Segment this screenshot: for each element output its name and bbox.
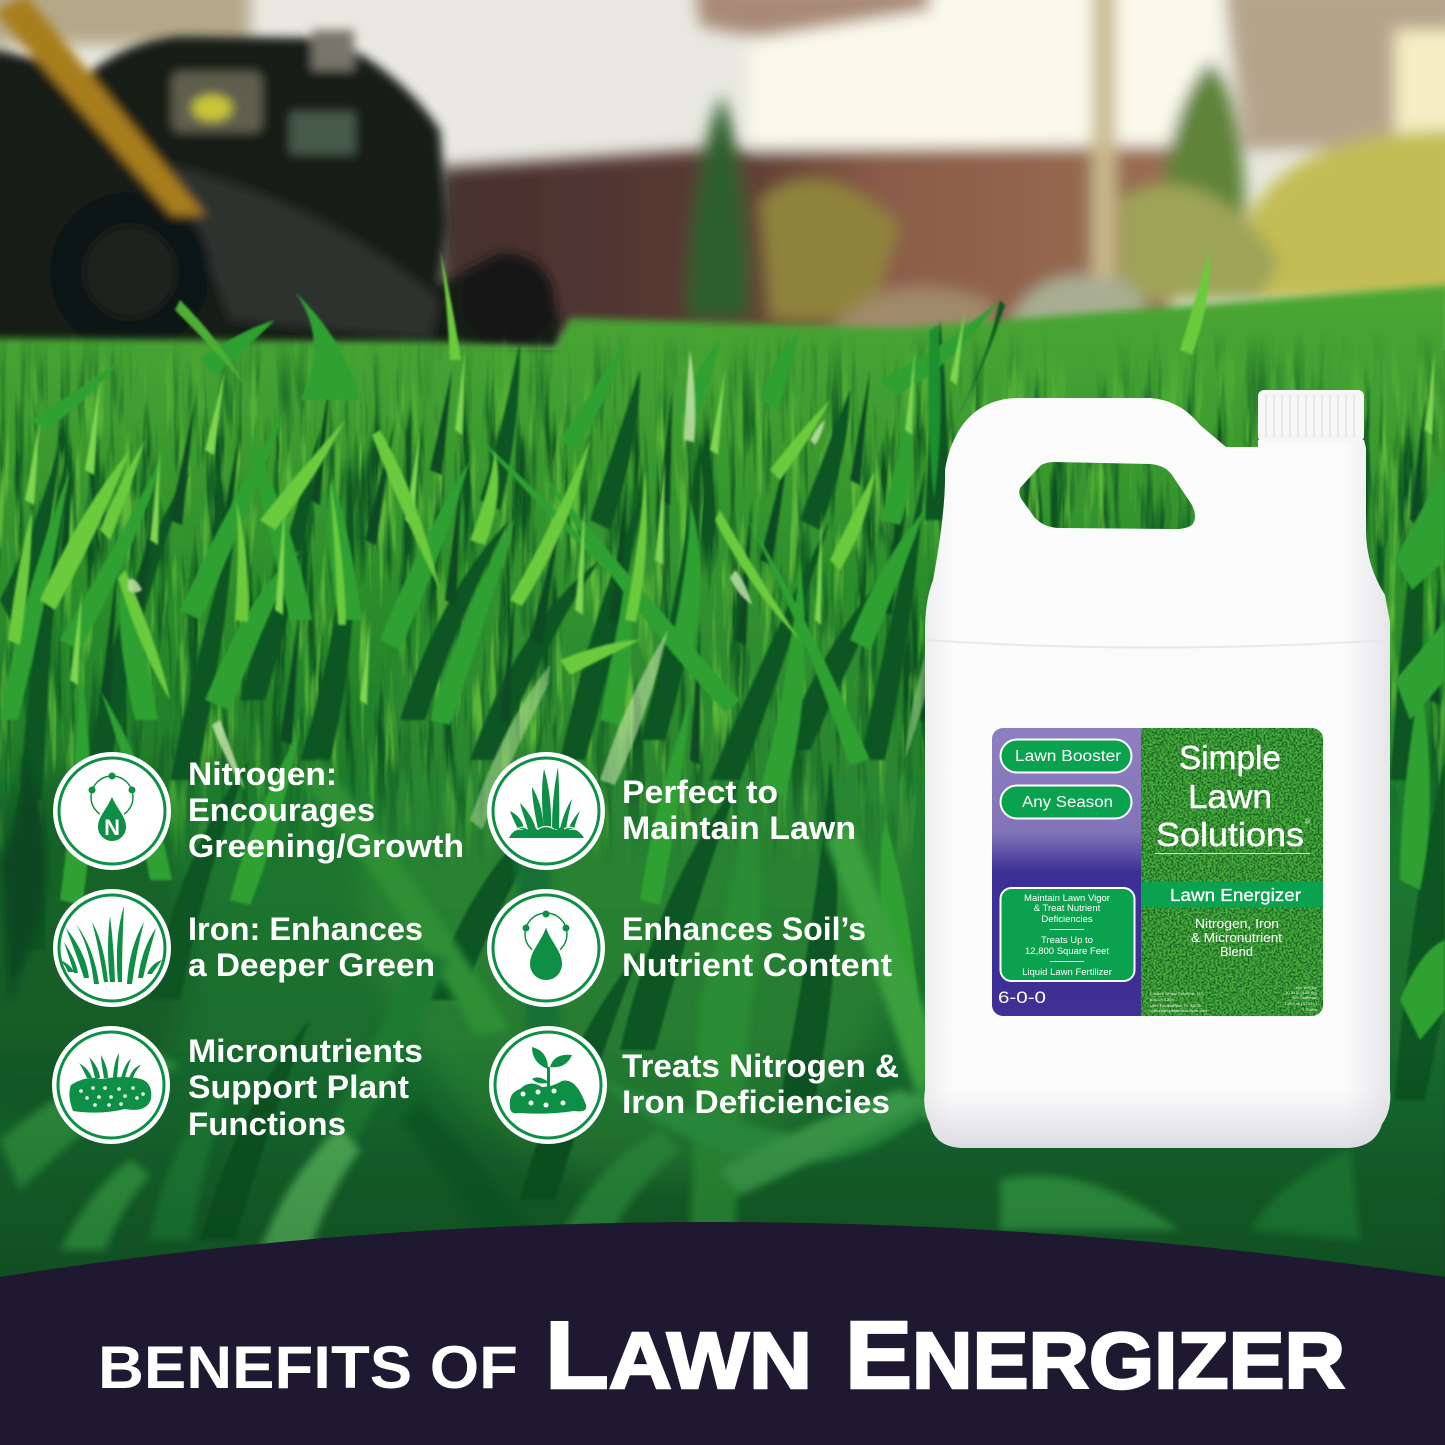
label: benefits box: Treats Up to <box>1041 935 1093 946</box>
label: product name band <box>1141 882 1323 907</box>
text: nitrogen <box>188 756 464 864</box>
label: purple side <box>992 728 1141 1016</box>
bottom banner <box>0 1222 1445 1445</box>
grass blades: thin bright strands <box>25 310 1435 705</box>
label: benefits box: Maintain Lawn Vigor <box>1024 893 1110 904</box>
grass texture streaks <box>0 330 1445 870</box>
label: Any Season pill: Any Season <box>1022 794 1113 811</box>
text: nitrogen: Nitrogen: <box>188 756 337 792</box>
icon: grass on mounds <box>487 752 605 870</box>
label: Lawn Booster pill: Lawn Booster <box>1015 748 1121 765</box>
label: blend description <box>1192 918 1282 956</box>
label: fine print: Net Contents: <box>1293 995 1317 1000</box>
product label <box>992 728 1323 1016</box>
grass blades: pale highlights <box>128 350 940 830</box>
text: soil nutrient content <box>622 911 892 983</box>
text: maintain lawn: Perfect to <box>622 774 778 810</box>
icon: water drop with molecule <box>487 889 605 1007</box>
label: fine print: 10.31 lb (4.68 Kg) <box>1285 990 1318 995</box>
jug body <box>924 398 1390 1148</box>
jug cap <box>1258 390 1364 442</box>
label: benefits box: & Treat Nutrient <box>1034 903 1101 914</box>
label: blend description: & Micronutrient <box>1191 931 1283 945</box>
text: maintain lawn: Maintain Lawn <box>622 810 856 846</box>
label: Any Season pill <box>1000 786 1132 818</box>
label: benefits box: Deficiencies <box>1041 914 1093 925</box>
icon: tall grass <box>53 889 171 1007</box>
grass blades: bright layer <box>8 250 1210 700</box>
label: product name band: Lawn Energizer <box>1170 885 1301 905</box>
label: fine print <box>1150 985 1318 1013</box>
text: nitrogen: Encourages <box>188 792 375 828</box>
benefit: treats deficiencies <box>489 1026 899 1144</box>
text: soil nutrient content: Enhances Soil’s <box>622 911 866 947</box>
label: fine print: Net Weight: <box>1296 985 1317 990</box>
label: benefits box: Liquid Lawn Fertilizer <box>1022 967 1112 978</box>
label: blend description: Nitrogen, Iron <box>1195 917 1279 931</box>
grass blades: mid green layer <box>0 292 1445 1040</box>
label: brand name: ® <box>1305 818 1311 826</box>
text: micronutrients: Functions <box>188 1106 346 1142</box>
grass blades: dark layer <box>0 300 1445 1240</box>
label: benefits box <box>1000 888 1134 981</box>
banner heading <box>98 1302 1345 1409</box>
text: iron: a Deeper Green <box>188 947 435 983</box>
grass blades: thin dark strands <box>60 370 1440 765</box>
label: brand name: Lawn <box>1188 778 1272 815</box>
banner heading: BENEFITS OF <box>98 1334 518 1401</box>
text: treats deficiencies: Iron Deficiencies <box>622 1084 890 1120</box>
banner heading: ENERGIZER <box>845 1302 1345 1409</box>
text: micronutrients: Micronutrients <box>188 1033 423 1069</box>
label: NPK: 6-0-0 <box>998 989 1046 1007</box>
icon: nitrogen drop <box>53 752 171 870</box>
benefit: micronutrients <box>52 1026 423 1144</box>
label: fine print: hello@simplelawnsolutions.com <box>1150 1008 1207 1013</box>
icon: nitrogen drop: N <box>104 815 120 840</box>
label: fine print: 1 Gallon <box>1302 1007 1317 1012</box>
text: iron <box>188 911 435 983</box>
label: fine print: 504 CR 129A <box>1150 997 1174 1002</box>
icon: sprout in soil <box>489 1026 607 1144</box>
text: micronutrients: Support Plant <box>188 1069 409 1105</box>
label: benefits box: 12,800 Square Feet <box>1025 946 1109 957</box>
banner heading: LAWN <box>545 1302 812 1409</box>
text: nitrogen: Greening/Growth <box>188 828 464 864</box>
photo background: lawn base <box>0 285 1445 1300</box>
label: fine print: Lake Panasoffkee, FL 33538 <box>1150 1003 1202 1008</box>
label: fine print: 128 fl oz (3.785 L) <box>1285 1001 1318 1006</box>
benefit: maintain lawn <box>487 752 856 870</box>
lawn bottom shade <box>0 1050 1445 1290</box>
text: treats deficiencies <box>622 1048 899 1120</box>
photo background: blurred garden and mower <box>0 0 1445 352</box>
benefit: soil nutrient content <box>487 889 892 1007</box>
label: brand name <box>1155 739 1311 854</box>
benefit: nitrogen <box>53 752 464 870</box>
label: brand name: Simple <box>1179 739 1281 776</box>
label: blend description: Blend <box>1220 945 1253 959</box>
text: soil nutrient content: Nutrient Content <box>622 947 892 983</box>
text: treats deficiencies: Treats Nitrogen & <box>622 1048 899 1084</box>
label: grass side <box>1141 728 1323 1016</box>
icon: soil with grass <box>52 1026 170 1144</box>
benefit: iron <box>53 889 435 1007</box>
label: Lawn Booster pill <box>1000 740 1132 772</box>
text: micronutrients <box>188 1033 423 1142</box>
label: brand name: Solutions <box>1156 816 1304 853</box>
text: maintain lawn <box>622 774 856 846</box>
product jug <box>924 390 1390 1148</box>
grass blades: large blurred foreground <box>0 750 1360 1250</box>
label: fine print: Custom Simple Solutions, LLC <box>1150 991 1204 996</box>
text: iron: Iron: Enhances <box>188 911 423 947</box>
